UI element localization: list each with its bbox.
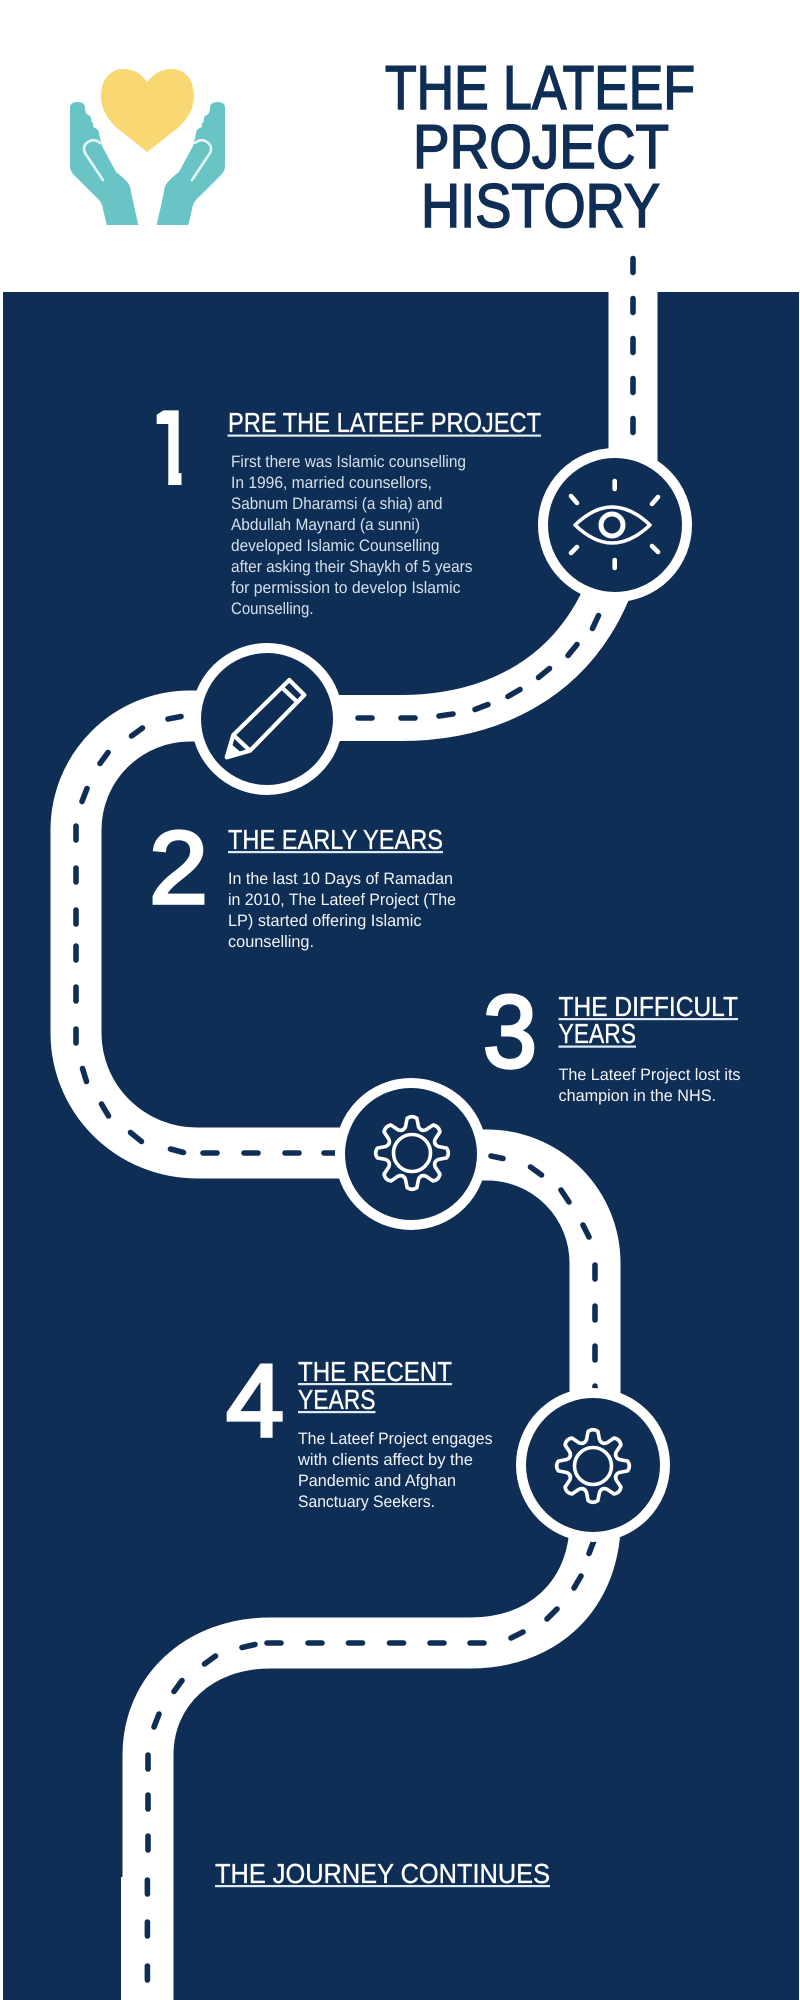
road centre dashes bbox=[76, 258, 633, 1980]
heading 4: THE RECENT bbox=[298, 1356, 452, 1387]
milestone circle: eye bbox=[543, 453, 687, 597]
body text 3 bbox=[558, 1065, 740, 1105]
body text 1 bbox=[231, 452, 472, 618]
body text 1: First there was Islamic counselling bbox=[231, 452, 466, 471]
body text 1: In 1996, married counsellors, bbox=[231, 473, 432, 492]
body text 4: The Lateef Project engages bbox=[298, 1429, 492, 1448]
body text 1: after asking their Shaykh of 5 years bbox=[231, 557, 472, 576]
icon: gear bbox=[376, 1117, 448, 1189]
closing heading: THE JOURNEY CONTINUES bbox=[215, 1858, 550, 1889]
icon: right hand bbox=[157, 102, 225, 225]
heading 1: PRE THE LATEEF PROJECT bbox=[228, 407, 541, 438]
body text 2: In the last 10 Days of Ramadan bbox=[228, 869, 453, 888]
icon: hands holding a heart bbox=[70, 69, 225, 225]
milestone circle: gear 1 bbox=[340, 1083, 482, 1225]
heading 3 bbox=[558, 991, 738, 1049]
heading 4: YEARS bbox=[298, 1384, 376, 1415]
number 1: 1 bbox=[138, 388, 198, 508]
number 4: 4 bbox=[226, 1343, 284, 1458]
heading 4 bbox=[298, 1356, 452, 1415]
body text 1: Sabnum Dharamsi (a shia) and bbox=[231, 494, 442, 513]
title: HISTORY bbox=[421, 172, 660, 241]
milestone circle: pencil bbox=[196, 648, 338, 790]
body text 4: Pandemic and Afghan bbox=[298, 1471, 456, 1490]
body text 1: Counselling. bbox=[231, 599, 314, 618]
title: THE LATEEF bbox=[385, 54, 695, 123]
number 2: 2 bbox=[149, 810, 208, 925]
icon: left hand bbox=[70, 102, 138, 225]
body text 1: for permission to develop Islamic bbox=[231, 578, 460, 597]
step 1: pre the Lateef Project bbox=[156, 410, 541, 618]
step 4: the recent years bbox=[226, 1343, 492, 1511]
body text 3: The Lateef Project lost its bbox=[558, 1065, 740, 1084]
body text 4: Sanctuary Seekers. bbox=[298, 1492, 435, 1511]
step 3: the difficult years bbox=[483, 974, 740, 1105]
title: PROJECT bbox=[413, 113, 669, 182]
number 3: 3 bbox=[483, 974, 537, 1089]
winding road bbox=[76, 292, 633, 2000]
body text 3: champion in the NHS. bbox=[558, 1086, 716, 1105]
milestone circle: gear 2 bbox=[521, 1393, 665, 1537]
body text 4: with clients affect by the bbox=[297, 1450, 473, 1469]
icon: gear bbox=[557, 1430, 629, 1502]
heading 3: THE DIFFICULT bbox=[558, 991, 738, 1022]
body text 1: Abdullah Maynard (a sunni) bbox=[231, 515, 420, 534]
body text 2 bbox=[228, 869, 456, 951]
heading 2: THE EARLY YEARS bbox=[228, 824, 443, 855]
body text 1: developed Islamic Counselling bbox=[231, 536, 440, 555]
icon: pencil bbox=[227, 680, 304, 757]
body text 2: counselling. bbox=[228, 932, 314, 951]
heading 3: YEARS bbox=[558, 1018, 636, 1049]
body text 4 bbox=[297, 1429, 492, 1511]
body text 2: in 2010, The Lateef Project (The bbox=[228, 890, 456, 909]
title bbox=[385, 54, 695, 241]
body text 2: LP) started offering Islamic bbox=[228, 911, 422, 930]
icon: eye bbox=[571, 481, 658, 568]
icon: heart bbox=[101, 69, 194, 152]
step 2: the early years bbox=[149, 810, 456, 951]
